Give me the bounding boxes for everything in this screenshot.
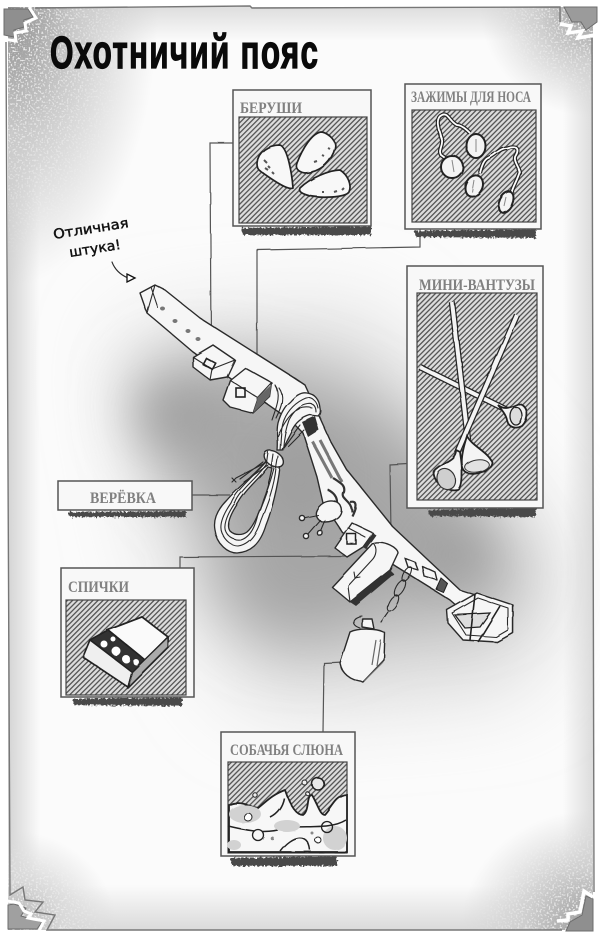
belt illustration xyxy=(140,285,513,682)
belt strap xyxy=(140,285,513,642)
panel: mini plungers xyxy=(407,266,543,517)
icon: earplugs xyxy=(257,132,350,197)
heading: earplugs: БЕРУШИ xyxy=(240,100,302,117)
corner ornament: bottom right xyxy=(557,891,593,931)
callout: great thing: штука! xyxy=(68,237,122,261)
heading: rope: ВЕРЁВКА xyxy=(90,489,156,507)
corner ornament: top right xyxy=(560,7,597,38)
corner ornament: bottom left xyxy=(7,901,44,933)
pouch: medium xyxy=(223,368,272,413)
connector lines xyxy=(180,143,420,732)
chain xyxy=(381,565,414,622)
corner ornament: top left xyxy=(3,7,36,41)
callout: great thing xyxy=(52,215,130,261)
panel: rope xyxy=(58,481,192,517)
pouch: lower large xyxy=(332,542,398,606)
heading: dog saliva: СОБАЧЬЯ СЛЮНА xyxy=(230,742,343,759)
rope coil xyxy=(214,393,320,553)
icon: matchbox xyxy=(83,617,168,687)
heading: mini plungers: МИНИ-ВАНТУЗЫ xyxy=(419,277,535,294)
icon: saliva splash xyxy=(227,778,347,852)
stud device xyxy=(299,501,341,539)
flask xyxy=(340,616,385,682)
panel: dog saliva xyxy=(221,732,355,866)
pouch: small xyxy=(193,345,235,380)
heading: matches: СПИЧКИ xyxy=(68,579,129,596)
panel: matches xyxy=(61,568,194,706)
panel: nose clips xyxy=(405,84,541,238)
icon: nose clips xyxy=(438,114,520,215)
icon: plungers xyxy=(420,302,527,493)
title: Охотничий пояс xyxy=(50,27,318,79)
arrow: to belt tip xyxy=(112,262,135,282)
buckle xyxy=(447,593,513,642)
heading: nose clips: ЗАЖИМЫ ДЛЯ НОСА xyxy=(411,89,531,106)
panel: earplugs xyxy=(233,90,371,235)
pouch: lower small xyxy=(335,523,376,557)
callout: great thing: Отличная xyxy=(52,215,130,243)
